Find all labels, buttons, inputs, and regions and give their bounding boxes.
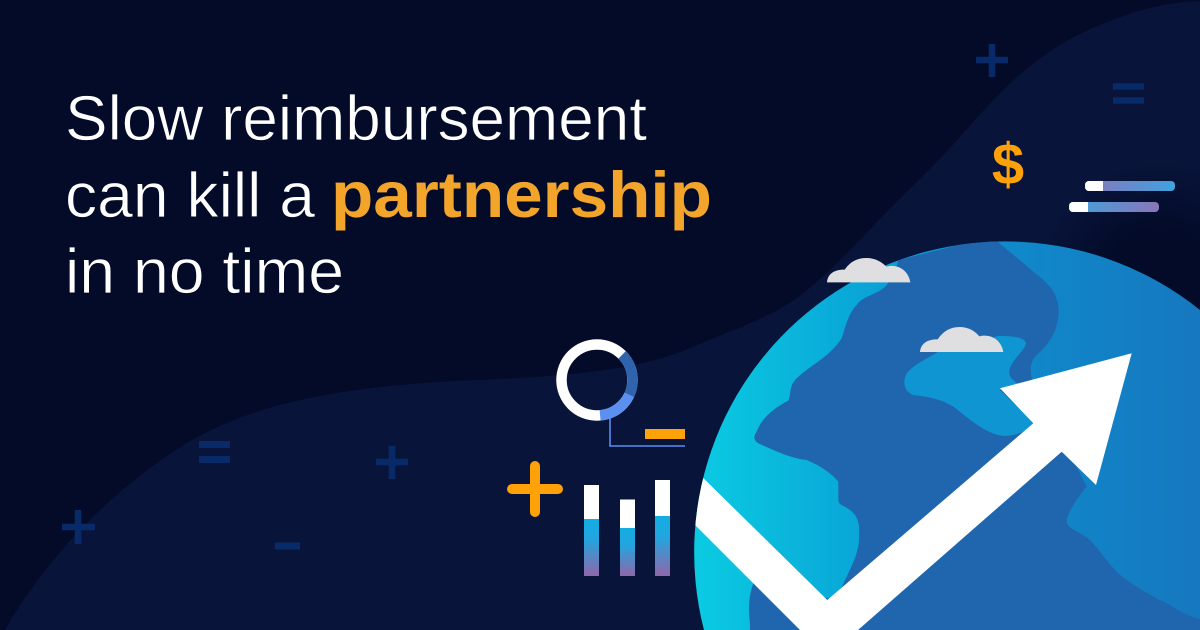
orange plus <box>512 466 558 512</box>
progress pills <box>1069 181 1175 212</box>
growth arrow <box>680 353 1132 630</box>
leader line <box>610 417 685 446</box>
faint equals top <box>1113 86 1144 100</box>
lake <box>904 336 1035 436</box>
headline <box>65 84 712 307</box>
headline line 1: Slow reimbursement <box>65 84 647 154</box>
pill lower <box>1069 202 1159 212</box>
donut chart with leader line <box>562 344 685 446</box>
land masses <box>749 237 1200 630</box>
faint plus top <box>976 44 1008 77</box>
ocean <box>694 241 1200 630</box>
shadow around globe <box>1035 160 1200 350</box>
bar 1 <box>584 485 599 576</box>
pill upper <box>1085 181 1175 191</box>
icon: dollar sign: $ <box>992 132 1024 197</box>
donut light segment <box>600 395 629 415</box>
bar 3 <box>655 480 670 576</box>
bar chart <box>584 480 670 576</box>
faint plus center <box>376 446 408 479</box>
headline line 2: can kill a <box>65 161 316 231</box>
cloud upper <box>827 258 910 282</box>
faint minus <box>275 542 300 550</box>
donut ring <box>562 344 632 416</box>
globe <box>680 237 1200 630</box>
faint plus left <box>62 510 95 544</box>
faint equals left <box>199 444 230 460</box>
bar 2 <box>620 500 635 576</box>
headline line 3: in no time <box>65 237 344 307</box>
donut dark segment <box>622 355 633 395</box>
cloud lower <box>920 327 1003 352</box>
highlighted word: partnership <box>331 158 712 231</box>
orange minus <box>645 429 685 439</box>
